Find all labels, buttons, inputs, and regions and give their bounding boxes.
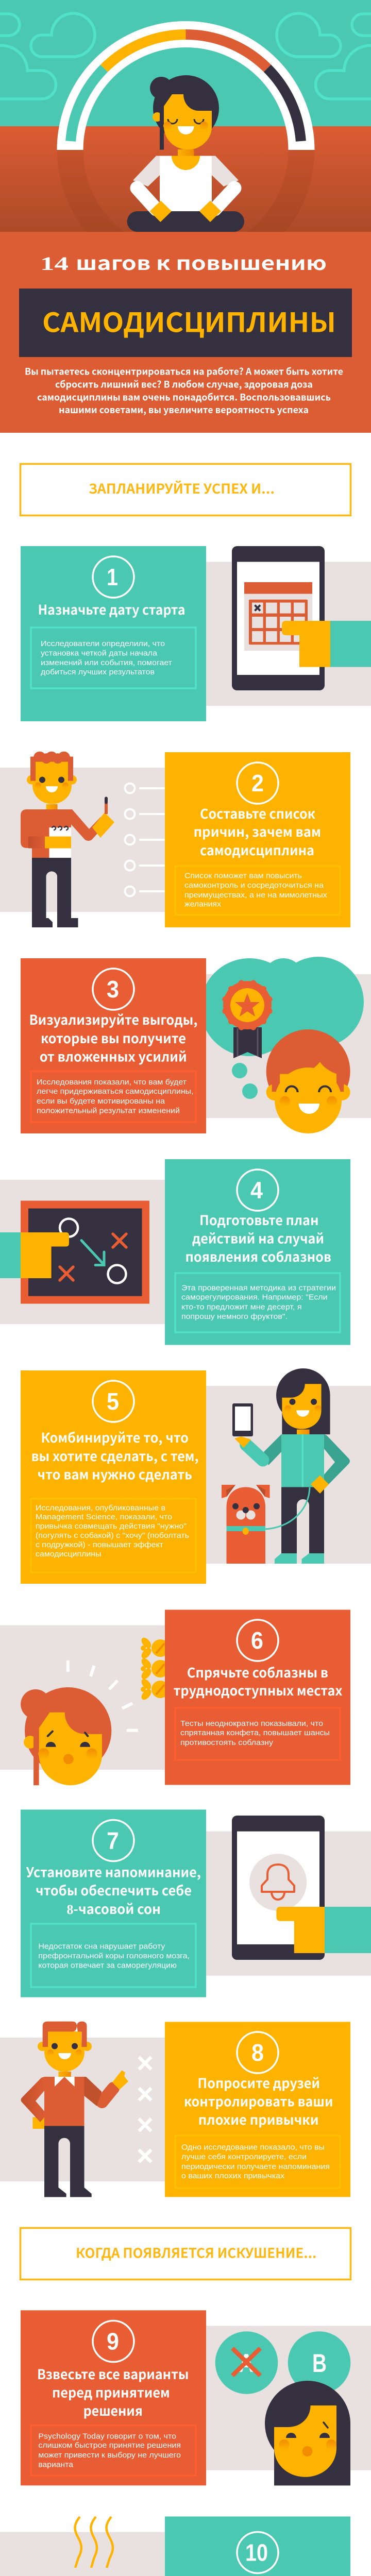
step 3 text: положительный результат изменений [37, 1107, 180, 1115]
step 9 text: слишком быстрое принятие решения [38, 2441, 181, 2450]
step 8 title [184, 2073, 333, 2129]
step number 5: 5 [107, 1388, 119, 1415]
crosses [139, 2057, 151, 2162]
head [27, 752, 77, 804]
step 3 illustration: dreaming of a medal [200, 957, 371, 1133]
arm [69, 809, 107, 841]
step 10 illustration: hand holding a warm cup [0, 2517, 165, 2576]
torso [32, 809, 71, 858]
clouds left [0, 13, 95, 99]
panel: step 3 [21, 958, 206, 1133]
head [38, 2022, 92, 2072]
step 8 title: плохие привычки [198, 2110, 318, 2129]
title: шагов к повышению [76, 248, 327, 276]
left arm [32, 2117, 44, 2129]
phone [232, 1403, 253, 1436]
step 6 title: Спрячьте соблазны в [187, 1663, 328, 1682]
step 4 illustration: tactic board [0, 1180, 165, 1324]
step 2 title [194, 804, 321, 859]
step 8 text: о ваших плохих привычках [181, 2172, 285, 2180]
step 8 title: контролировать ваши [184, 2092, 333, 2110]
step 3 title: Визуализируйте выгоды, [29, 1010, 198, 1029]
step 5 text [31, 1499, 196, 1572]
step 8 title: Попросите друзей [197, 2073, 320, 2092]
intro text: сбросить лишний вес? В любом случае, здоровая доза [55, 377, 313, 391]
panel: step 6 [165, 1609, 350, 1785]
legs [281, 1487, 324, 1553]
step 7 text: Недостаток сна нарушает работу [38, 1942, 165, 1951]
step 2 text: желаниях [184, 900, 222, 909]
step 5 title: вы хотите сделать, с тем, [31, 1446, 199, 1465]
step 5 text: (погулять с собакой) с "хочу" (поболтать [36, 1531, 189, 1540]
step 5 text: Исследования, опубликованные в [36, 1503, 165, 1513]
step 2 title: самодисциплина [200, 840, 314, 859]
step number 9: 9 [107, 2328, 119, 2354]
step 7 title: 8-часовой сон [67, 1899, 161, 1918]
step number 9 [93, 2320, 134, 2362]
woman head [276, 1368, 330, 1434]
step 4 text: попрошу немного фруктов". [181, 1312, 288, 1321]
clouds right [277, 13, 371, 99]
intro text: Вы пытаетесь сконцентрироваться на работе? А может быть хотите [25, 365, 343, 378]
step 9 text: варианта [38, 2460, 74, 2469]
step 8 text: периодически получаете напоминания [181, 2162, 330, 2171]
thought cloud [200, 957, 364, 1099]
right arm [102, 2088, 113, 2102]
right arm [324, 1434, 350, 1489]
step number 7: 7 [107, 1827, 119, 1854]
section heading 2 [21, 2228, 350, 2279]
step number 8: 8 [251, 2039, 264, 2066]
torso [44, 2077, 85, 2126]
candies [140, 1636, 169, 1702]
step 3 text: если вы будете мотивированы на [37, 1097, 165, 1106]
step 9 title: Взвесьте все варианты [37, 2364, 189, 2383]
panel: step 1 [21, 546, 206, 721]
step 3 title: которые вы получите [41, 1028, 186, 1047]
step 1 text: изменений или события, помогает [41, 658, 172, 667]
step number 1 [93, 556, 134, 598]
step 5 text: привычка совмещать действия "нужно" [36, 1522, 187, 1531]
surprise rays [68, 1660, 138, 1731]
step 4 text [175, 1273, 340, 1332]
step number 1: 1 [107, 564, 118, 590]
step number 10: 10 [245, 2539, 268, 2566]
rainbow arc [70, 35, 301, 150]
step 3 text [31, 1071, 196, 1122]
panel: step 9 [21, 2310, 206, 2485]
step 6 text: спрятанная конфета, повышает шансы [180, 1728, 330, 1737]
panel: step 10 [165, 2516, 350, 2576]
step 7 illustration: phone with bell [206, 1816, 371, 1976]
step 6 title [174, 1663, 343, 1700]
step 2 illustration: man with notebook and checklist [0, 752, 165, 927]
intro text [25, 365, 343, 416]
medal [221, 979, 274, 1031]
step 8 text: Одно исследование показало, что вы [181, 2143, 325, 2152]
step 6 title: труднодоступных местах [174, 1681, 343, 1700]
step 4 title: действий на случай [192, 1229, 324, 1248]
step number 7 [93, 1820, 134, 1861]
title banner: САМОДИСЦИПЛИНЫ [42, 301, 336, 340]
panel: step 4 [165, 1159, 350, 1345]
step 5 title: Комбинируйте то, что [41, 1428, 189, 1447]
section heading 1: ЗАПЛАНИРУЙТЕ УСПЕХ И... [89, 479, 275, 498]
step number 3: 3 [107, 976, 119, 1003]
option A [215, 2331, 278, 2394]
step 5 text: с подружкой) - повышает эффект [36, 1540, 163, 1549]
steam [75, 2517, 113, 2568]
step 3 text: Исследования показали, что вам будет [37, 1078, 187, 1087]
section heading 1 [21, 464, 350, 515]
step number 4: 4 [250, 1177, 263, 1204]
step number 4 [237, 1170, 278, 1211]
step number 3 [93, 969, 134, 1010]
step 4 text: саморегулирования. Например: "Если [181, 1293, 328, 1302]
panel: step 2 [165, 752, 350, 927]
rainbow reflection [70, 150, 301, 266]
section heading 2: КОГДА ПОЯВЛЯЕТСЯ ИСКУШЕНИЕ... [76, 2243, 316, 2262]
intro text: нашими советами, вы увеличите вероятность успеха [59, 403, 309, 416]
panel: step 5 [21, 1370, 206, 1584]
step 2 text [175, 866, 340, 915]
step 1 text: добиться лучших результатов [41, 668, 155, 676]
step number 2 [237, 762, 278, 804]
step 7 text: которая отвечает за саморегуляцию [38, 1961, 177, 1970]
step 2 title: Составьте список [200, 804, 315, 823]
intro text: самодисциплины вам очень понадобится. Воспользовавшись [37, 390, 331, 403]
step 1 title: Назначьте дату старта [38, 600, 185, 619]
step number 6 [237, 1620, 278, 1661]
legs [32, 858, 78, 927]
step 3 text: легче придерживаться самодисциплины, [37, 1087, 194, 1096]
step 6 text: Тесты неоднократно показывали, что [180, 1719, 323, 1728]
step 2 title: причин, зачем вам [194, 822, 321, 841]
title banner [19, 289, 352, 357]
step 7 text: префронтальной коры головного мозга, [38, 1952, 190, 1960]
step number 8 [237, 2032, 278, 2073]
step 9 text: может привести к выбору не лучшего [38, 2451, 181, 2460]
step 4 text: Эта проверенная методика из стратегии [181, 1284, 336, 1292]
option B [288, 2331, 350, 2394]
step 9 title: перед принятием [52, 2382, 170, 2402]
step 5 illustration: woman with phone and dog [206, 1368, 371, 1564]
step 7 text [31, 1924, 196, 1987]
step 3 title: от вложенных усилий [40, 1047, 187, 1065]
step 7 title [26, 1862, 201, 1918]
woman head [21, 1687, 111, 1785]
step 9 title [37, 2364, 189, 2420]
step 8 illustration: man pointing at crosses [0, 2022, 165, 2197]
step 9 title: решения [83, 2401, 143, 2420]
panel: step 8 [165, 2022, 350, 2197]
ribbon [233, 1027, 262, 1058]
left arm [264, 1434, 281, 1465]
step number 6: 6 [251, 1627, 263, 1654]
step 5 title [31, 1428, 199, 1484]
step 6 text [175, 1708, 340, 1760]
step 4 text: кто-то предложит мне десерт, я [181, 1303, 302, 1312]
option A: A [239, 2349, 254, 2378]
dog [227, 1487, 265, 1564]
step 8 text [175, 2136, 340, 2188]
step 9 text [31, 2426, 196, 2476]
step 5 title: что вам нужно сделать [37, 1464, 192, 1484]
boy head [266, 1029, 350, 1133]
step 9 illustration: choosing between A and B [206, 2326, 371, 2485]
step 1 text: Исследователи определили, что [41, 639, 165, 648]
step 5 text: самодисциплины [36, 1550, 101, 1558]
title: 14 [40, 253, 69, 275]
step 1 text [31, 628, 196, 688]
step 1 illustration: phone calendar [206, 546, 371, 706]
step 6 text: противостоять соблазну [180, 1738, 274, 1747]
checklist [125, 783, 165, 896]
step 6 illustration: surprised woman and hidden candy [0, 1625, 169, 1785]
step number 2: 2 [251, 770, 264, 796]
step 8 text: лучше себя контролируете, если [181, 2153, 307, 2161]
step 9 text: Psychology Today говорит о том, что [38, 2432, 176, 2441]
step number 5 [93, 1381, 134, 1422]
panel: step 7 [21, 1809, 206, 1997]
step 5 text: Management Science, показали, что [36, 1513, 172, 1521]
hero: meditating woman under rainbow [0, 0, 371, 433]
woman [127, 75, 244, 232]
step 4 title [185, 1210, 331, 1266]
step 2 text: Список поможет вам повысить [184, 872, 302, 880]
step 4 title: появления соблазнов [185, 1247, 331, 1266]
step 1 text: установка четкой даты начала [41, 649, 158, 657]
legs [44, 2126, 92, 2197]
step 7 title: чтобы обеспечить себе [36, 1880, 192, 1900]
woman head [265, 2381, 350, 2485]
step 3 title [29, 1010, 198, 1065]
step 7 title: Установите напоминание, [26, 1862, 201, 1882]
option B: B [312, 2349, 327, 2378]
step number 10 [237, 2532, 278, 2573]
step 2 text: самоконтроль и сосредоточиться на [184, 881, 324, 890]
step 2 text: преимуществах, а не на мимолетных [184, 891, 327, 900]
step 4 title: Подготовьте план [199, 1210, 318, 1229]
